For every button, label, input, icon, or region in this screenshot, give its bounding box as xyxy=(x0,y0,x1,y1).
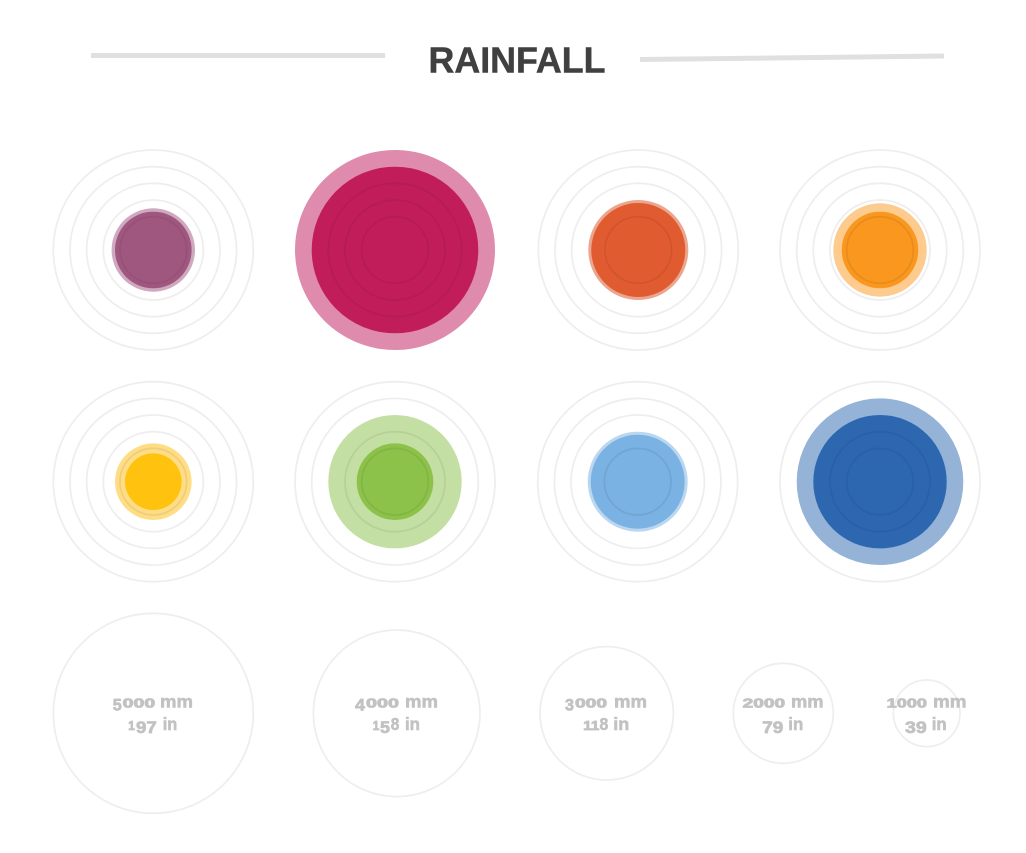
legend: 4000 mm: 4 xyxy=(355,697,366,715)
legend: 4000 mm: 8 xyxy=(391,714,400,734)
legend: 5000 mm: 000 xyxy=(123,696,155,711)
legend: 3000 mm: 11 xyxy=(583,718,599,733)
legend: 1000 mm xyxy=(887,680,966,747)
legend: 1000 mm: 1000 xyxy=(887,696,927,711)
title: RAINFALL xyxy=(428,39,606,80)
chart: green rainfall circle xyxy=(295,382,495,582)
legend: 2000 mm xyxy=(733,663,833,763)
chart: light blue rainfall circle xyxy=(538,382,738,582)
legend: 4000 mm: 5 xyxy=(380,719,390,737)
chart: red-orange rainfall circle xyxy=(538,150,738,350)
legend: 4000 mm: 000 xyxy=(366,696,399,711)
legend: 2000 mm: 79 xyxy=(762,719,783,737)
legend: 3000 mm: 000 xyxy=(575,696,607,711)
legend: 1000 mm: mm xyxy=(933,692,966,712)
legend: 5000 mm: 5 xyxy=(113,697,122,715)
legend: 5000 mm: mm xyxy=(160,692,193,712)
legend: 4000 mm xyxy=(313,630,480,797)
legend: 3000 mm: 8 xyxy=(600,714,609,734)
legend: 5000 mm: in xyxy=(163,714,177,734)
title rule: right xyxy=(640,54,944,62)
legend: 1000 mm: in xyxy=(932,714,947,734)
chart: dark blue rainfall circle xyxy=(780,382,980,582)
legend: 2000 mm: in xyxy=(788,714,803,734)
legend: 5000 mm xyxy=(53,613,253,813)
legend: 4000 mm: 1 xyxy=(373,718,379,733)
legend: 3000 mm xyxy=(540,647,673,780)
chart: orange rainfall circle xyxy=(780,150,980,350)
title rule: left xyxy=(91,53,385,58)
legend: 4000 mm: mm xyxy=(405,692,438,712)
legend: 1000 mm: 39 xyxy=(905,719,927,737)
chart: crimson rainfall circle xyxy=(295,150,495,350)
legend: 3000 mm: 3 xyxy=(565,697,574,715)
legend: 3000 mm: mm xyxy=(614,692,647,712)
legend: 3000 mm: in xyxy=(613,714,629,734)
legend: 5000 mm: 1 xyxy=(128,718,135,733)
legend: 2000 mm: 2000 xyxy=(743,696,785,711)
chart: purple rainfall circle xyxy=(53,150,253,350)
chart: yellow rainfall circle xyxy=(53,382,253,582)
legend: 4000 mm: in xyxy=(405,714,420,734)
legend: 5000 mm: 97 xyxy=(136,719,157,737)
legend: 2000 mm: mm xyxy=(791,692,824,712)
